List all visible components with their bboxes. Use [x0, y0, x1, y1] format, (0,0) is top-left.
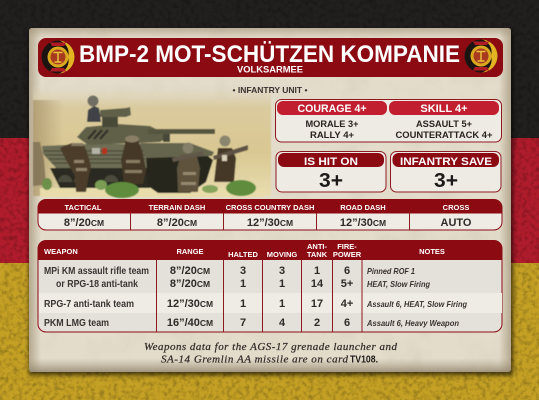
row: PKM LMG team: 16”/40CM — [167, 317, 213, 329]
weapon table header: WEAPON — [44, 247, 78, 256]
footnote — [144, 341, 398, 366]
ground — [40, 188, 265, 197]
lower hull and wheels — [50, 168, 150, 188]
row: PKM LMG team: 4 — [279, 317, 286, 329]
infantry figure with launcher — [172, 142, 204, 192]
title banner — [38, 38, 503, 77]
row: PKM LMG team: PKM LMG team — [44, 318, 109, 329]
infantry figure centre — [121, 136, 146, 184]
panel: infantry save: INFANTRY SAVE — [400, 156, 492, 168]
row: RPG-18 anti-tank: 8”/20CM — [170, 278, 210, 290]
commander — [87, 96, 101, 122]
panel: courage and skill — [276, 100, 502, 142]
weapon table header: FIRE- — [337, 242, 357, 251]
row: MPi KM assault rifle team: MPi KM assault rifle team — [44, 266, 149, 277]
movement table: AUTO — [441, 217, 472, 229]
row: RPG-7 anti-tank team: 4+ — [341, 298, 353, 310]
weapon table header: HALTED — [228, 250, 259, 259]
panel: infantry save: 3+ — [434, 170, 458, 192]
row: RPG-18 anti-tank: or RPG-18 anti-tank — [56, 279, 138, 290]
row: PKM LMG team: 7 — [240, 317, 246, 329]
grass tufts — [42, 178, 256, 198]
footnote: TV108. — [350, 354, 378, 366]
icon: left DDR emblem — [42, 40, 75, 74]
icon: right DDR emblem — [464, 40, 498, 72]
weapons table — [38, 240, 502, 332]
row: MPi KM assault rifle team: 8”/20CM — [170, 265, 210, 277]
weapon table header: ANTI- — [307, 242, 327, 251]
row: RPG-7 anti-tank team — [44, 298, 468, 310]
row: PKM LMG team: Assault 6, Heavy Weapon — [366, 318, 459, 328]
row: MPi KM assault rifle team: Pinned ROF 1 — [367, 266, 415, 276]
subheading: VOLKSARMEE — [237, 64, 303, 74]
row: RPG-7 anti-tank team: 1 — [279, 298, 285, 310]
row: RPG-7 anti-tank team: 17 — [311, 298, 323, 310]
movement table: CROSS — [443, 203, 469, 212]
row: MPi KM assault rifle team: 1 — [314, 265, 320, 277]
weapon table header: POWER — [333, 250, 362, 259]
row: RPG-18 anti-tank: HEAT, Slow Firing — [367, 279, 431, 289]
missile launcher — [102, 113, 118, 127]
row: MPi KM assault rifle team — [44, 265, 415, 277]
photo: BMP-2 with infantry — [33, 84, 271, 198]
infantry figure with RPG — [213, 136, 248, 182]
panel: courage and skill: COURAGE 4+ — [298, 103, 366, 115]
panel: is hit on — [276, 152, 386, 192]
panel: is hit on: 3+ — [319, 170, 343, 192]
row: RPG-18 anti-tank — [56, 278, 431, 290]
panel: is hit on: IS HIT ON — [304, 156, 358, 168]
weapon table header: RANGE — [176, 247, 204, 256]
glacis — [140, 143, 214, 158]
footnote: SA-14 Gremlin AA missile are on card — [161, 354, 348, 366]
front dark hull — [146, 153, 213, 193]
movement table: CROSS COUNTRY DASH — [226, 203, 314, 212]
weapon table header: NOTES — [419, 247, 445, 256]
row: MPi KM assault rifle team: 6 — [344, 265, 350, 277]
panel: courage and skill: SKILL 4+ — [420, 103, 468, 115]
row: MPi KM assault rifle team: 3 — [279, 265, 285, 277]
panel: courage and skill: ASSAULT 5+ — [416, 119, 472, 130]
footnote: Weapons data for the AGS-17 grenade launcher and — [144, 341, 398, 353]
movement table: TERRAIN DASH — [149, 203, 205, 212]
row: RPG-18 anti-tank: 1 — [240, 278, 246, 290]
insignia — [92, 148, 100, 154]
panel: courage and skill: COUNTERATTACK 4+ — [396, 130, 493, 141]
main gun — [148, 129, 215, 134]
panel: infantry save — [390, 152, 501, 192]
row: RPG-18 anti-tank: 14 — [311, 278, 324, 290]
hull side with louvres — [42, 144, 150, 168]
movement table: 8”/20CM — [64, 217, 104, 229]
row: RPG-7 anti-tank team: 12”/30CM — [167, 298, 213, 310]
movement table: 8”/20CM — [157, 217, 197, 229]
movement table — [38, 200, 502, 230]
weapon table header: MOVING — [267, 250, 297, 259]
weapon table header — [44, 242, 445, 259]
infantry figure left — [60, 143, 91, 192]
panel: courage and skill: MORALE 3+ — [306, 119, 359, 130]
movement table: TACTICAL — [65, 203, 102, 212]
card panel — [29, 28, 513, 375]
row: RPG-7 anti-tank team: 1 — [240, 298, 246, 310]
row: RPG-18 anti-tank: 5+ — [341, 278, 353, 290]
panel: courage and skill: RALLY 4+ — [310, 130, 354, 141]
turret — [77, 124, 170, 145]
row: RPG-7 anti-tank team: Assault 6, HEAT, Slow Firing — [366, 299, 468, 309]
row: PKM LMG team: 6 — [344, 317, 350, 329]
movement table: 12”/30CM — [340, 217, 386, 229]
weapon table header: TANK — [307, 250, 328, 259]
row: PKM LMG team — [44, 317, 459, 329]
row: RPG-18 anti-tank: 1 — [279, 278, 285, 290]
heading: BMP-2 MOT-SCHÜTZEN KOMPANIE — [79, 41, 460, 68]
movement table: 12”/30CM — [247, 217, 293, 229]
unit type label: • INFANTRY UNIT • — [233, 85, 307, 95]
row: PKM LMG team: 2 — [314, 317, 320, 329]
movement table: ROAD DASH — [340, 203, 386, 212]
row: RPG-7 anti-tank team: RPG-7 anti-tank team — [44, 299, 134, 310]
row: MPi KM assault rifle team: 3 — [240, 265, 246, 277]
blurred background figure — [33, 142, 46, 186]
